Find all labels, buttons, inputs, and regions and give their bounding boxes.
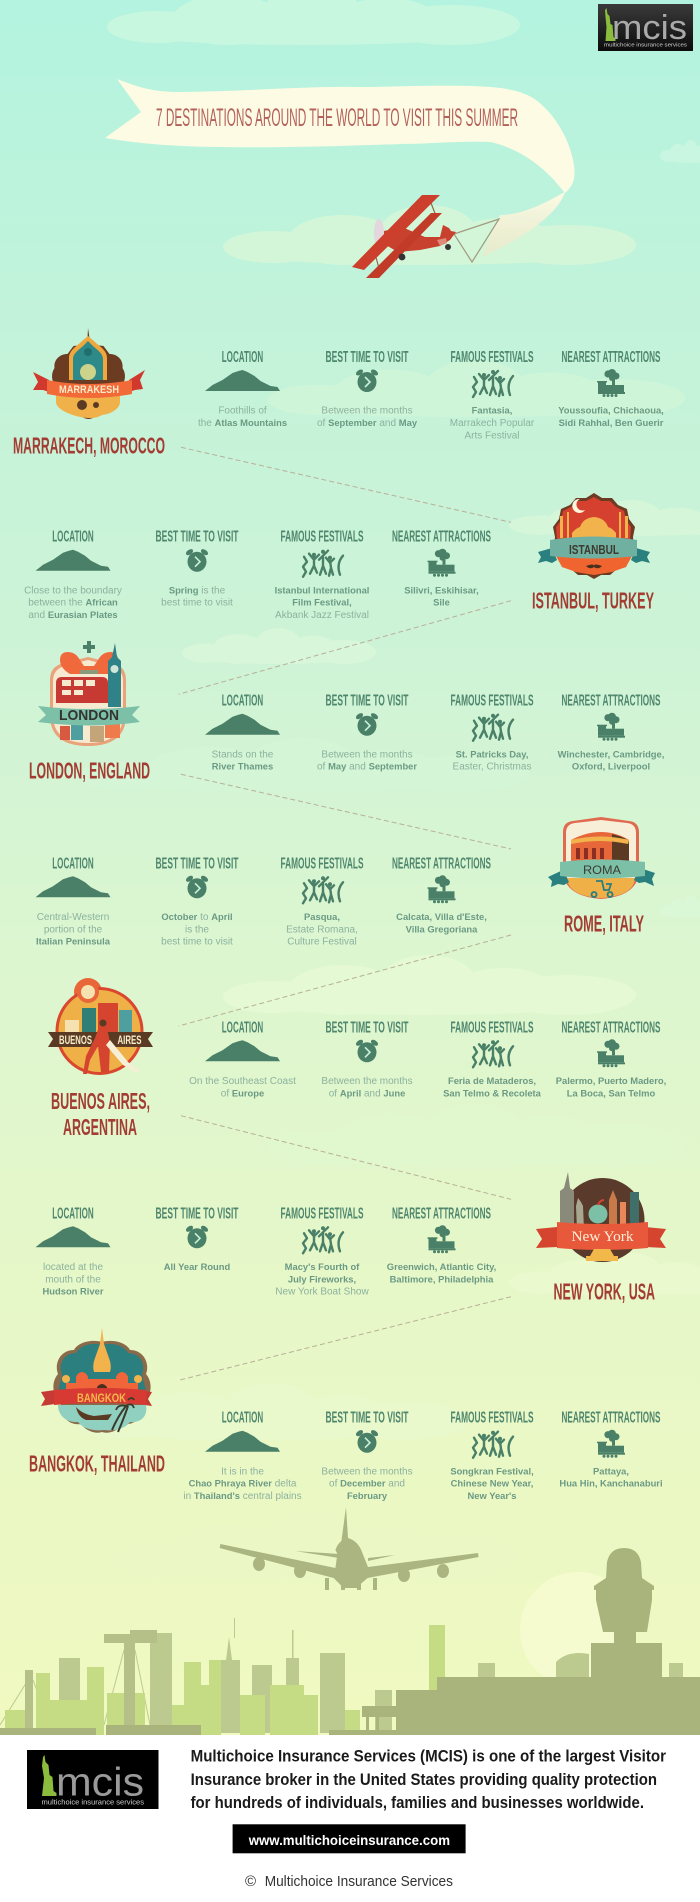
location column: portion of the (44, 924, 103, 935)
festivals column: Songkran Festival, (450, 1465, 534, 1476)
best time column (156, 529, 239, 609)
location column: LOCATION (222, 1019, 263, 1036)
title banner (105, 79, 575, 257)
attractions column: La Boca, San Telmo (567, 1087, 655, 1098)
location column (36, 1205, 110, 1297)
location column: On the Southeast Coast (189, 1076, 296, 1087)
festivals column (443, 1019, 542, 1098)
biplane with tow rope (352, 195, 499, 278)
location column: Chao Phraya River delta (189, 1478, 297, 1490)
best time column: Between the months (321, 1466, 413, 1477)
attractions column: Villa Gregoriana (406, 923, 478, 934)
festivals column: FAMOUS FESTIVALS (280, 529, 364, 546)
best time column: Between the months (321, 1076, 413, 1087)
festivals column: St. Patricks Day, (456, 748, 528, 759)
best time column: October to April (161, 911, 233, 923)
festivals column (275, 1205, 369, 1298)
best time column: of April and June (329, 1087, 405, 1099)
best time column: BEST TIME TO VISIT (326, 1019, 409, 1036)
location column (198, 349, 287, 429)
festivals column: Culture Festival (287, 937, 357, 948)
best time column: best time to visit (161, 937, 233, 948)
attractions column: Hua Hin, Kanchanaburi (559, 1478, 663, 1489)
details row: Buenos Aires (189, 1019, 666, 1099)
badge: Rome (548, 817, 655, 899)
attractions column (558, 349, 664, 428)
attractions column (559, 1410, 663, 1489)
location column: Central-Western (37, 912, 109, 923)
logo: top right (598, 4, 693, 51)
festivals column: Marrakech Popular (450, 418, 535, 429)
festivals column: FAMOUS FESTIVALS (280, 1205, 364, 1222)
best time column: BEST TIME TO VISIT (156, 529, 239, 546)
best time column: of May and September (317, 761, 417, 773)
festivals column (450, 1410, 534, 1501)
details row: Bangkok (183, 1410, 663, 1502)
logo: footer (27, 1750, 158, 1809)
attractions column (392, 529, 491, 608)
festivals column: Easter, Christmas (453, 762, 531, 773)
badge: Buenos Aires (48, 978, 153, 1075)
best time column (317, 693, 417, 773)
background clouds (76, 0, 700, 1579)
attractions column (558, 693, 664, 772)
location column: River Thames (212, 761, 273, 772)
best time column: of December and (329, 1478, 405, 1490)
location column: Stands on the (212, 749, 274, 760)
best time column: Between the months (321, 406, 413, 417)
location column (24, 529, 122, 621)
location column (183, 1410, 302, 1502)
location column: and Eurasian Plates (28, 609, 118, 621)
festivals column: FAMOUS FESTIVALS (450, 1410, 534, 1427)
badge: London (38, 641, 140, 746)
festivals column: New York Boat Show (275, 1287, 369, 1298)
best time column: February (347, 1490, 388, 1501)
attractions column: Sile (433, 597, 450, 608)
location column: between the African (28, 597, 118, 609)
attractions column: Oxford, Liverpool (572, 761, 650, 772)
attractions column: NEAREST ATTRACTIONS (392, 529, 491, 546)
location column: Hudson River (43, 1286, 104, 1297)
festivals column (280, 855, 364, 948)
attractions column: Palermo, Puerto Madero, (556, 1075, 666, 1086)
festivals column: Estate Romana, (286, 924, 358, 935)
logo: top right: multichoice insurance services (604, 42, 687, 48)
attractions column: NEAREST ATTRACTIONS (392, 855, 491, 872)
attractions column: Pattaya, (593, 1465, 629, 1476)
best time column: BEST TIME TO VISIT (326, 349, 409, 366)
location column: LOCATION (52, 855, 94, 872)
badge label: LONDON (59, 707, 119, 724)
location column: LOCATION (222, 349, 263, 366)
location column (36, 855, 111, 947)
copyright: Multichoice Insurance Services (265, 1873, 453, 1890)
best time column (317, 349, 418, 429)
best time column: BEST TIME TO VISIT (156, 855, 239, 872)
location column: Close to the boundary (24, 585, 122, 596)
festivals column: Akbank Jazz Festival (275, 610, 369, 621)
best time column: All Year Round (164, 1261, 231, 1272)
airliner silhouette (220, 1507, 479, 1590)
best time column: BEST TIME TO VISIT (326, 1410, 409, 1427)
location column: of Europe (221, 1087, 264, 1099)
attractions column: Calcata, Villa d'Este, (396, 911, 487, 922)
city name: Buenos Aires: BUENOS AIRES, (51, 1088, 150, 1114)
best time column: BEST TIME TO VISIT (326, 693, 409, 710)
website button: www.multichoiceinsurance.com (248, 1832, 450, 1848)
location column: LOCATION (52, 1205, 94, 1222)
location column (205, 693, 280, 772)
badge label: BANGKOK (77, 1391, 126, 1405)
festivals column: Chinese New Year, (451, 1478, 533, 1489)
attractions column: Silivri, Eskihisar, (404, 584, 479, 595)
logo: top right: mcis (612, 9, 687, 47)
festivals column: FAMOUS FESTIVALS (280, 855, 364, 872)
festivals column: San Telmo & Recoleta (443, 1087, 542, 1098)
best time column: Between the months (321, 749, 413, 760)
festivals column (450, 349, 535, 441)
company description (191, 1747, 666, 1812)
badge: New York (536, 1172, 666, 1262)
location column: the Atlas Mountains (198, 417, 287, 429)
festivals column: New Year's (468, 1490, 516, 1501)
details row: Marrakech (198, 349, 664, 441)
city name: London: LONDON, ENGLAND (29, 757, 150, 783)
attractions column (387, 1205, 496, 1284)
best time column (321, 1019, 413, 1099)
festivals column: FAMOUS FESTIVALS (450, 693, 534, 710)
attractions column: NEAREST ATTRACTIONS (392, 1205, 491, 1222)
badge: Istanbul (538, 493, 650, 579)
badge labels: BUENOS (59, 1033, 92, 1047)
attractions column (556, 1019, 666, 1098)
location column: in Thailand's central plains (183, 1490, 302, 1502)
badge label: New York (572, 1229, 634, 1245)
attractions column: Youssoufia, Chichaoua, (558, 405, 664, 416)
details row: New York (36, 1205, 496, 1298)
details row: London (205, 693, 664, 773)
festivals column: FAMOUS FESTIVALS (450, 349, 534, 366)
copyright: © (245, 1873, 256, 1890)
city skyline (0, 1548, 700, 1735)
best time column: Spring is the (169, 584, 226, 596)
city name: Bangkok: BANGKOK, THAILAND (29, 1451, 165, 1477)
attractions column: Baltimore, Philadelphia (390, 1273, 494, 1284)
attractions column: Winchester, Cambridge, (558, 748, 664, 759)
badge: Bangkok (41, 1328, 152, 1433)
best time column: best time to visit (161, 598, 233, 609)
details row: Istanbul (24, 529, 491, 621)
location column: Foothills of (218, 406, 267, 417)
badge label: ISTANBUL (569, 542, 619, 557)
festivals column: Feria de Mataderos, (448, 1075, 536, 1086)
badge label: ROMA (583, 863, 621, 877)
badge label: MARRAKESH (59, 384, 119, 396)
best time column: is the (185, 924, 209, 935)
attractions column (392, 855, 491, 934)
badge label: Aires: AIRES (118, 1033, 142, 1047)
city name: Marrakech: MARRAKECH, MOROCCO (13, 432, 165, 458)
location column: Italian Peninsula (36, 936, 111, 947)
festivals column: Istanbul International (275, 584, 369, 595)
company description: for hundreds of individuals, families and businesses worldwide. (191, 1793, 644, 1812)
badge: Marrakech (33, 328, 145, 419)
location column: LOCATION (52, 529, 94, 546)
city name: Buenos Aires: ARGENTINA (63, 1114, 137, 1140)
best time column (156, 855, 239, 948)
city name: Buenos Aires (51, 1088, 150, 1140)
dashed connector lines (179, 447, 511, 1380)
festivals column: Macy's Fourth of (285, 1261, 360, 1272)
festivals column: FAMOUS FESTIVALS (450, 1019, 534, 1036)
best time column (156, 1205, 239, 1272)
festivals column: Arts Festival (464, 430, 520, 441)
location column (189, 1019, 296, 1099)
location column: located at the (43, 1262, 103, 1273)
attractions column: Greenwich, Atlantic City, (387, 1261, 496, 1272)
footer white panel (0, 1735, 700, 1902)
festivals column (275, 529, 369, 621)
attractions column: Sidi Rahhal, Ben Guerir (559, 417, 664, 428)
best time column: BEST TIME TO VISIT (156, 1205, 239, 1222)
location column: mouth of the (45, 1274, 101, 1285)
location column: It is in the (221, 1466, 264, 1477)
website button (233, 1824, 466, 1853)
details row: Rome (36, 855, 491, 948)
best time column (321, 1410, 413, 1501)
sun behind control tower (520, 1572, 636, 1688)
festivals column: Pasqua, (304, 911, 340, 922)
festivals column: Fantasia, (472, 405, 512, 416)
festivals column (450, 693, 534, 773)
location column: LOCATION (222, 1410, 263, 1427)
best time column: of September and May (317, 417, 418, 429)
location column: LOCATION (222, 693, 263, 710)
festivals column: Film Festival, (292, 597, 352, 608)
logo: footer: mcis (56, 1761, 144, 1805)
festivals column: July Fireworks, (288, 1273, 356, 1284)
logo: footer: multichoice insurance services (42, 1800, 145, 1806)
